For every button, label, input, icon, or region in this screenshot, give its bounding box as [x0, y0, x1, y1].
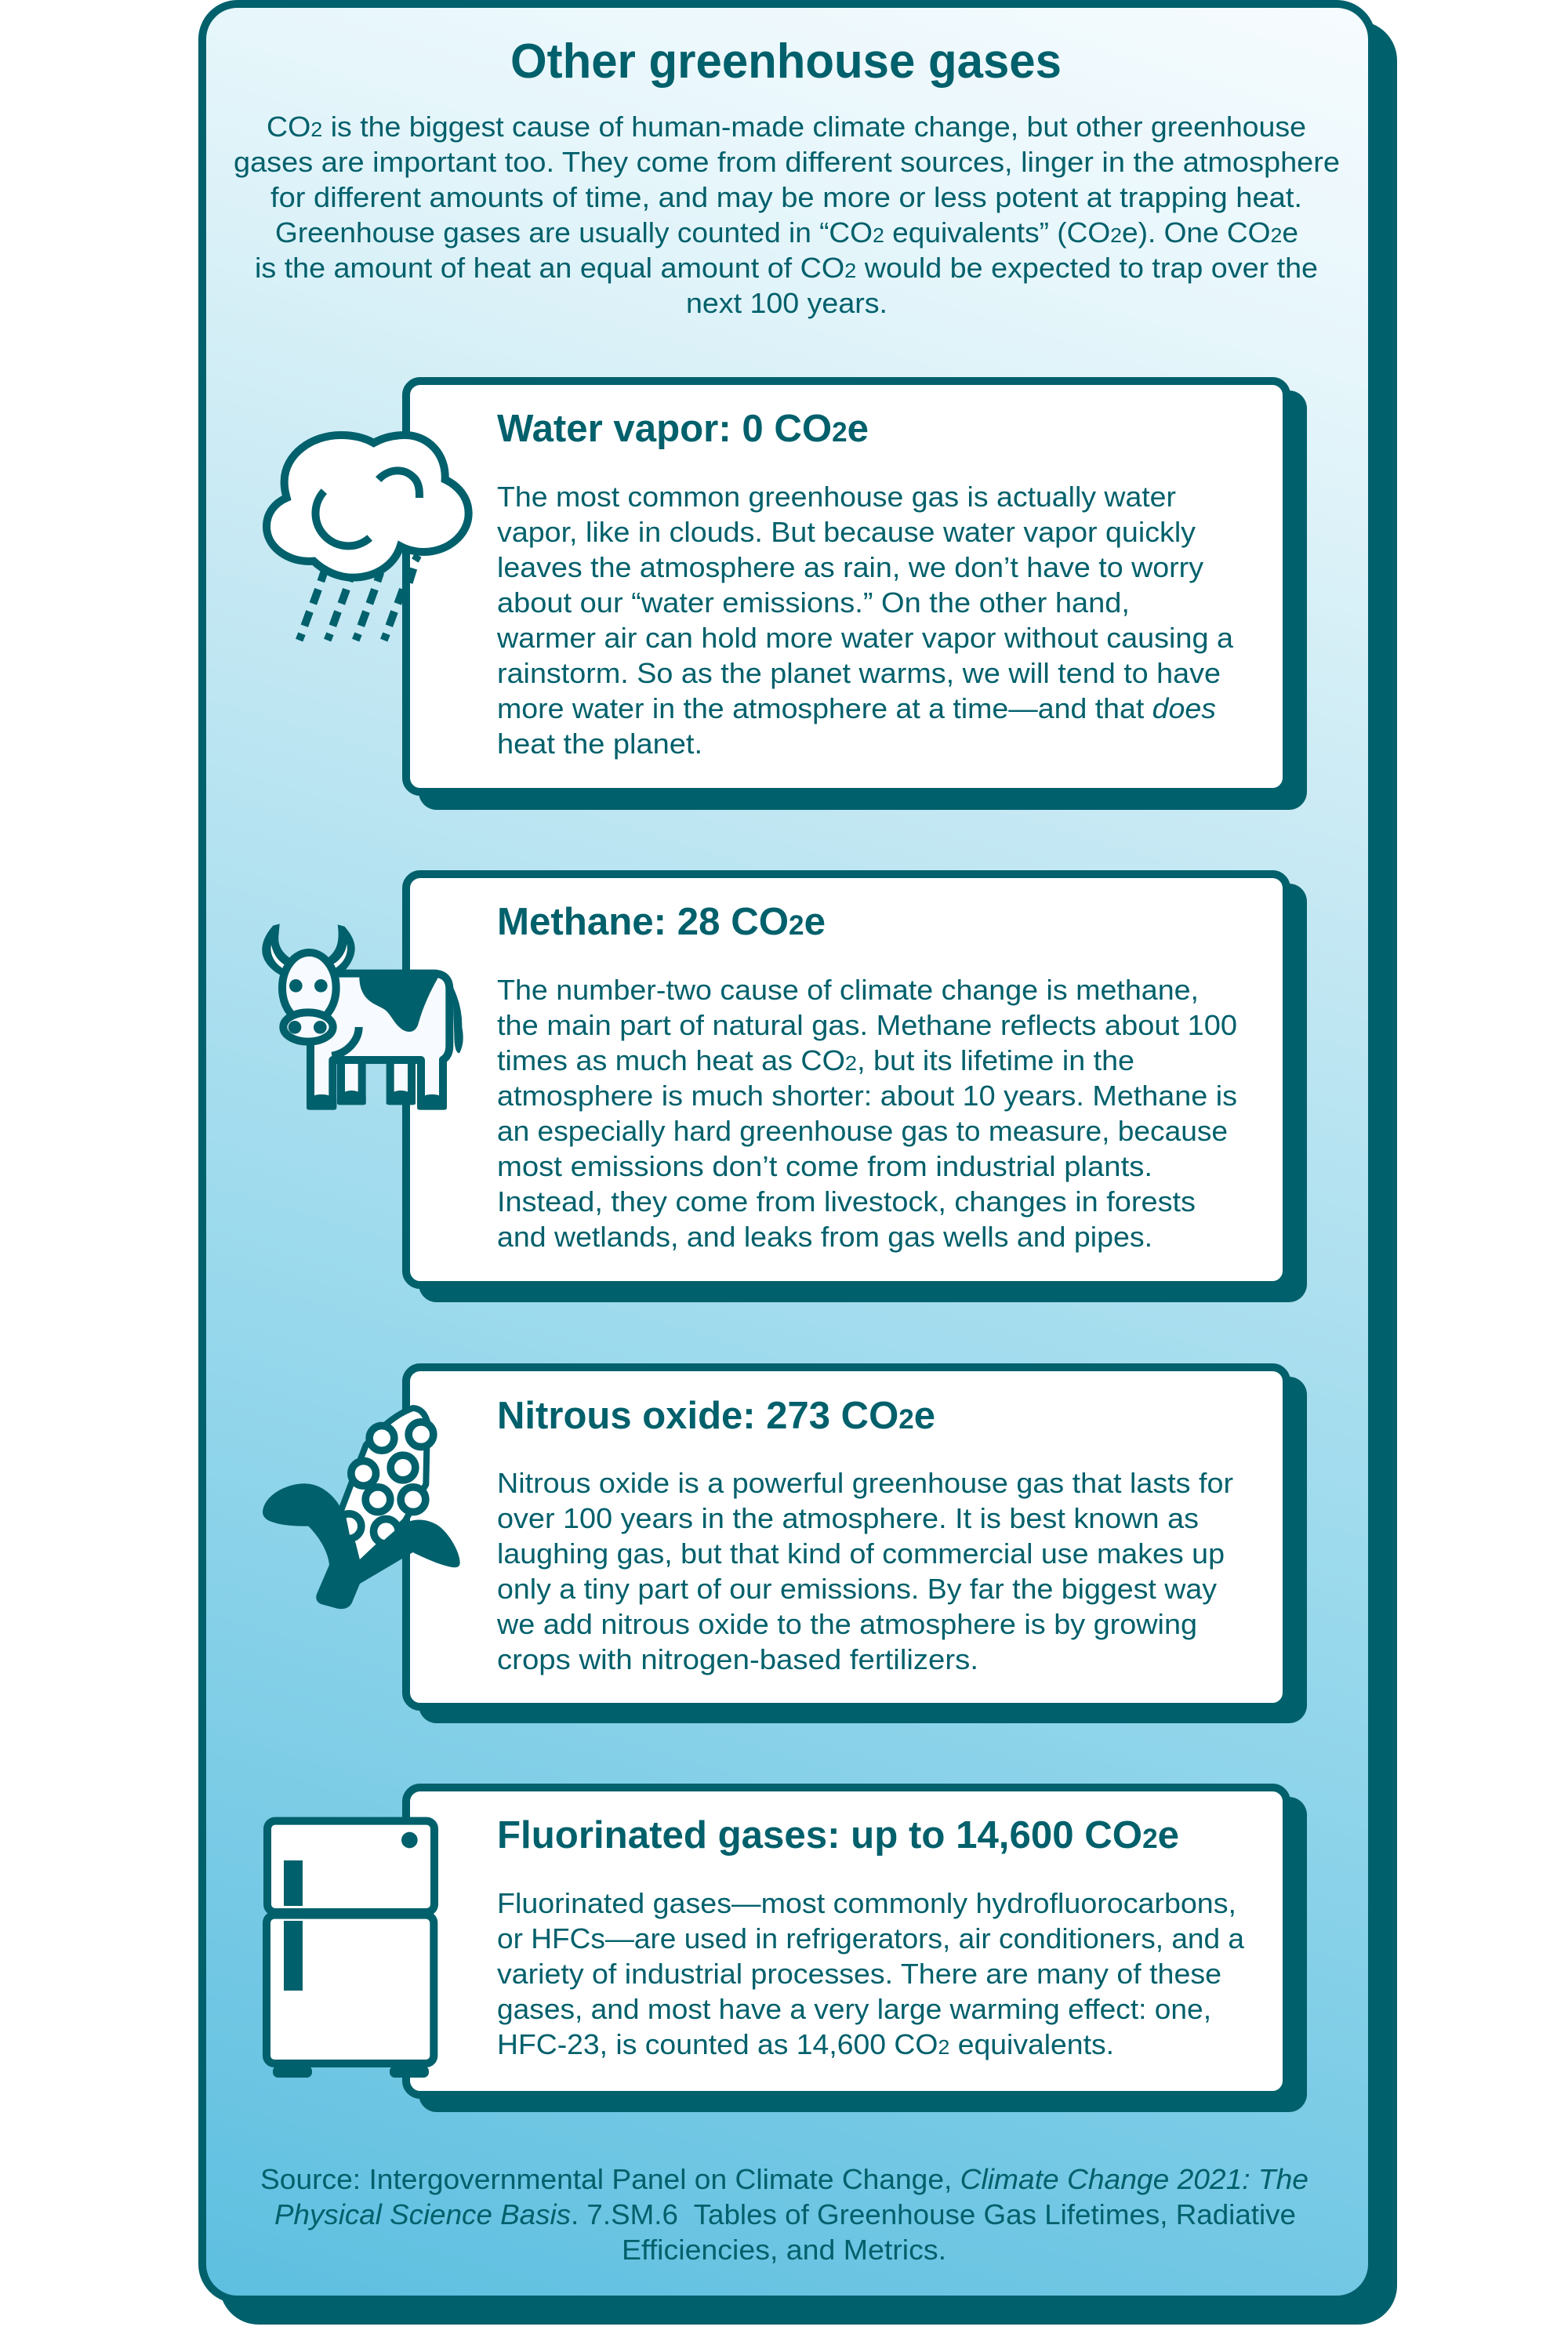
body text: water vapor: warmer air can hold more water vapor without causing a: [496, 622, 1234, 654]
intro text: [234, 111, 1340, 319]
panel: nitrous oxide: [263, 1367, 1307, 1723]
card: [406, 874, 1287, 1285]
card shadow: [419, 884, 1307, 1302]
intro text: Greenhouse gases are usually counted in “CO 2 equivalents” (CO 2e). One CO2e: [275, 216, 1298, 249]
intro text: is the amount of heat an equal amount of CO 2 would be expected to trap over the: [255, 252, 1318, 284]
source note: Efficiencies, and Metrics.: [622, 2234, 946, 2266]
body text: nitrous oxide: Nitrous oxide is a powerful greenhouse gas that lasts for: [497, 1467, 1233, 1499]
card: [406, 1788, 1287, 2095]
icon: cow: [262, 924, 463, 1110]
heading: water vapor: Water vapor: 0 CO2e: [497, 408, 869, 450]
body text: water vapor: about our “water emissions.” On the other hand,: [497, 586, 1130, 619]
card shadow: [419, 1377, 1307, 1723]
body text: nitrous oxide: [496, 1467, 1233, 1675]
body text: water vapor: vapor, like in clouds. But because water vapor quickly: [497, 516, 1196, 548]
body text: methane: times as much heat as CO 2, but its lifetime in the: [497, 1044, 1134, 1076]
body text: methane: Instead, they come from livestock, changes in forests: [497, 1185, 1196, 1218]
panel: fluorinated gases: [267, 1788, 1307, 2112]
body text: water vapor: rainstorm. So as the planet warms, we will tend to have: [497, 657, 1221, 689]
panel shadow: [220, 21, 1397, 2325]
heading: nitrous oxide: Nitrous oxide: 273 CO2e: [497, 1395, 935, 1437]
body text: water vapor: leaves the atmosphere as rain, we don’t have to worry: [497, 551, 1203, 583]
body text: methane: the main part of natural gas. Methane reflects about 100: [497, 1009, 1237, 1041]
panel: water vapor: [267, 381, 1307, 810]
body text: nitrous oxide: laughing gas, but that kind of commercial use makes up: [497, 1537, 1225, 1570]
body text: water vapor: heat the planet.: [497, 728, 702, 760]
card: [406, 381, 1287, 792]
body text: nitrous oxide: crops with nitrogen-based fertilizers.: [497, 1643, 978, 1675]
body text: water vapor: more water in the atmosphere at a time—and that does: [497, 692, 1216, 724]
icon: refrigerator: [267, 1821, 434, 2078]
body text: methane: atmosphere is much shorter: about 10 years. Methane is: [497, 1080, 1237, 1112]
body text: fluorinated gases: gases, and most have a very large warming effect: one,: [497, 1993, 1211, 2025]
intro text: CO2 is the biggest cause of human-made climate change, but other greenhouse: [267, 111, 1306, 143]
card shadow: [419, 1797, 1307, 2112]
body text: methane: most emissions don’t come from industrial plants.: [497, 1150, 1152, 1182]
body text: fluorinated gases: Fluorinated gases—most commonly hydrofluorocarbons,: [497, 1887, 1236, 1919]
intro text: for different amounts of time, and may be more or less potent at trapping heat.: [270, 181, 1302, 213]
body text: methane: and wetlands, and leaks from gas wells and pipes.: [497, 1221, 1152, 1253]
icon: corn: [263, 1408, 460, 1609]
card shadow: [419, 390, 1307, 810]
body text: nitrous oxide: only a tiny part of our emissions. By far the biggest way: [497, 1573, 1217, 1605]
body text: water vapor: The most common greenhouse gas is actually water: [497, 481, 1176, 513]
body text: water vapor: [496, 481, 1234, 760]
body text: methane: The number-two cause of climate change is methane,: [497, 974, 1199, 1006]
card: [406, 1367, 1287, 1707]
intro text: next 100 years.: [686, 287, 887, 319]
source note: Physical Science Basis. 7.SM.6 Tables of Greenhouse Gas Lifetimes, Radiative: [274, 2198, 1296, 2230]
body text: fluorinated gases: HFC-23, is counted as 14,600 CO 2 equivalents.: [497, 2028, 1114, 2060]
body text: fluorinated gases: variety of industrial processes. There are many of these: [497, 1958, 1221, 1990]
main panel background: [202, 4, 1372, 2299]
body text: nitrous oxide: we add nitrous oxide to the atmosphere is by growing: [496, 1608, 1197, 1640]
source note: Source: Intergovernmental Panel on Climate Change, Climate Change 2021: The: [260, 2163, 1308, 2195]
body text: fluorinated gases: [497, 1887, 1245, 2060]
source note: [260, 2163, 1308, 2266]
body text: methane: an especially hard greenhouse gas to measure, because: [497, 1115, 1228, 1147]
body text: fluorinated gases: or HFCs—are used in refrigerators, air conditioners, and a: [497, 1922, 1245, 1955]
body text: nitrous oxide: over 100 years in the atmosphere. It is best known as: [497, 1502, 1199, 1534]
heading: fluorinated gases: Fluorinated gases: up to 14,600 CO2e: [497, 1814, 1179, 1857]
panel: methane: [262, 874, 1307, 1302]
intro text: gases are important too. They come from different sources, linger in the atmosphere: [234, 146, 1340, 178]
title: Other greenhouse gases: [510, 34, 1062, 89]
body text: methane: [497, 974, 1237, 1253]
icon: rain cloud: [267, 435, 469, 641]
heading: methane: Methane: 28 CO2e: [497, 901, 826, 943]
